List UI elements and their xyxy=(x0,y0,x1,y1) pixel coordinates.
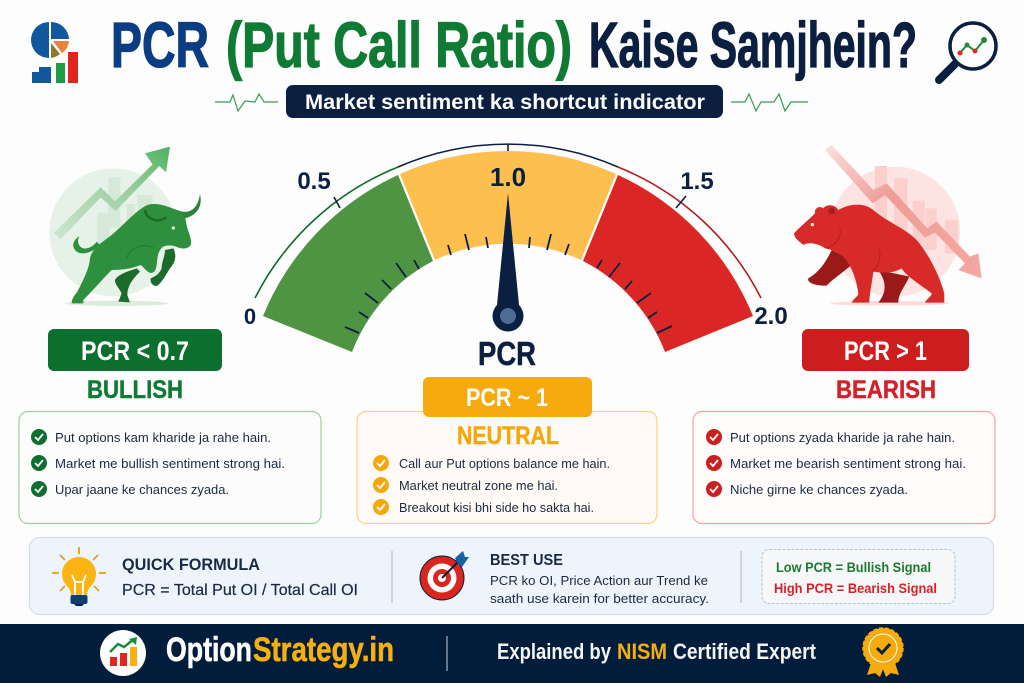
gauge scale labels: 1.0 xyxy=(490,162,526,192)
subtitle pill xyxy=(286,85,723,118)
icon: logo with pie chart and bars xyxy=(31,22,78,83)
title: PCR xyxy=(111,9,209,81)
panel: bearish points xyxy=(693,412,995,524)
gauge xyxy=(244,144,788,372)
panel: bullish points xyxy=(19,412,321,524)
panel: neutral points xyxy=(357,412,657,524)
panel: bearish points: Market me bearish sentiment strong hai. xyxy=(730,456,966,471)
text: quick formula xyxy=(122,555,358,599)
title: (Put Call Ratio) xyxy=(226,9,572,81)
icon: certification medal xyxy=(863,628,903,677)
badge: PCR above 1: PCR > 1 xyxy=(844,336,927,366)
callout: low and high PCR signals: Low PCR = Bullish Signal xyxy=(776,559,931,575)
subtitle pill: Market sentiment ka shortcut indicator xyxy=(305,91,705,114)
footer credit xyxy=(497,639,817,664)
gauge needle xyxy=(492,193,524,332)
gauge scale labels: 0 xyxy=(244,304,256,329)
gauge label PCR: PCR xyxy=(478,335,536,372)
panel: neutral points: Market neutral zone me hai. xyxy=(399,478,558,493)
footer bar xyxy=(0,624,1024,683)
icon: light bulb xyxy=(52,547,106,606)
icon: magnifier with chart xyxy=(939,23,996,80)
brand name xyxy=(166,631,394,669)
illustration: bull with rising arrow xyxy=(49,147,201,306)
panel: bearish points: Niche girne ke chances zyada. xyxy=(730,482,908,497)
gauge red zone xyxy=(583,175,753,352)
panel: quick formula and best use xyxy=(30,538,994,614)
subtitle pulse left xyxy=(215,94,278,111)
callout: low and high PCR signals: High PCR = Bearish Signal xyxy=(774,580,937,596)
badge: PCR below 0.7 xyxy=(48,329,222,371)
text: best use: PCR ko OI, Price Action aur Trend ke xyxy=(490,573,708,588)
badge: PCR above 1 xyxy=(802,329,969,371)
panel: bullish points: Upar jaane ke chances zyada. xyxy=(55,482,229,497)
gauge scale labels xyxy=(244,162,788,330)
panel: bullish points: Put options kam kharide ja rahe hain. xyxy=(55,430,271,445)
icon: target with arrow xyxy=(420,551,469,600)
text: best use: BEST USE xyxy=(490,552,563,569)
badge: PCR about 1: PCR ~ 1 xyxy=(466,384,548,412)
panel: neutral points: Breakout kisi bhi side ho sakta hai. xyxy=(399,500,594,515)
callout: low and high PCR signals xyxy=(762,550,955,604)
footer credit: Certified Expert xyxy=(673,639,817,664)
gauge green zone xyxy=(263,175,433,352)
text: best use xyxy=(490,552,709,606)
gauge scale labels: 2.0 xyxy=(754,303,788,330)
gauge inner ticks xyxy=(345,234,672,333)
gauge scale labels: 0.5 xyxy=(297,168,331,195)
brand name: Strategy.in xyxy=(253,631,394,669)
footer credit: NISM xyxy=(617,639,667,664)
icon: footer logo xyxy=(100,630,146,676)
text: quick formula: QUICK FORMULA xyxy=(122,555,260,574)
text: quick formula: PCR = Total Put OI / Total Call OI xyxy=(122,582,358,599)
panel: bullish points: Market me bullish sentiment strong hai. xyxy=(55,456,285,471)
heading: bearish: BEARISH xyxy=(836,376,936,404)
badge: PCR below 0.7: PCR < 0.7 xyxy=(81,336,189,366)
panel: neutral points: Call aur Put options balance me hain. xyxy=(399,456,610,471)
illustration: bear with falling arrow xyxy=(794,145,982,306)
badge: PCR about 1 xyxy=(423,377,592,417)
gauge scale labels: 1.5 xyxy=(680,168,714,195)
brand name: Option xyxy=(166,631,252,669)
gauge yellow zone xyxy=(400,151,616,260)
panel: bearish points: Put options zyada kharide ja rahe hain. xyxy=(730,430,955,445)
heading: neutral: NEUTRAL xyxy=(457,422,559,450)
footer credit: Explained by xyxy=(497,639,612,664)
text: best use: saath use karein for better accuracy. xyxy=(490,591,709,606)
heading: bullish: BULLISH xyxy=(87,376,183,404)
gauge outer scale arc xyxy=(255,144,761,298)
title xyxy=(111,9,917,81)
subtitle pulse right xyxy=(731,94,808,111)
